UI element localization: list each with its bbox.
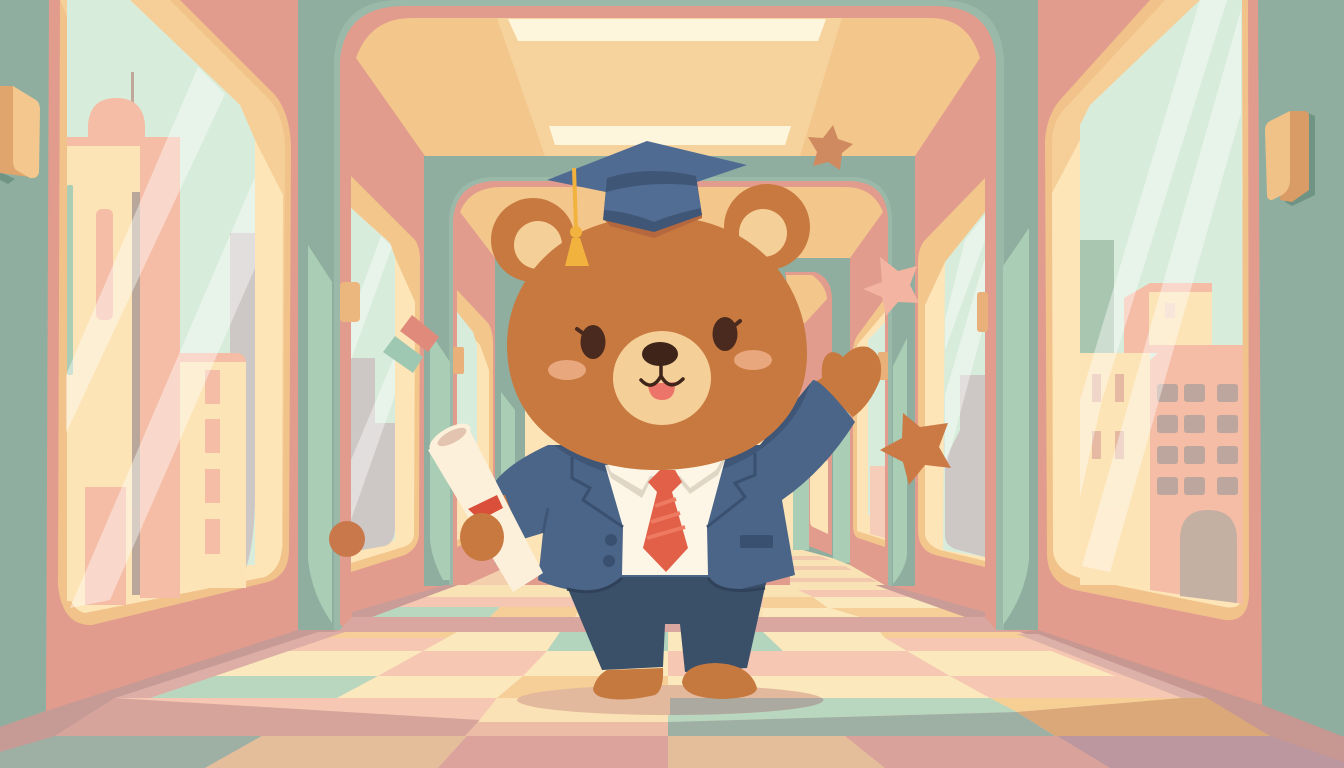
row4 teal — [668, 698, 1017, 722]
pink upper building — [1124, 283, 1212, 353]
cap skull — [603, 171, 702, 232]
left back window cream — [457, 320, 489, 540]
back baseboard right — [875, 585, 985, 622]
back floor orange right lower — [830, 608, 972, 617]
tower window slot — [96, 209, 113, 320]
icon: door handle right — [977, 292, 988, 332]
tassel fringe — [565, 238, 589, 266]
icon: confetti green — [383, 336, 423, 373]
bear jacket — [493, 380, 855, 592]
window glass — [1080, 0, 1243, 580]
panel: right mid window — [918, 178, 985, 567]
low building windows — [205, 370, 220, 554]
row3 pink right — [950, 676, 1182, 698]
row5 mauve — [1057, 736, 1344, 768]
back floor upper right pink — [798, 590, 915, 597]
bear — [425, 141, 881, 699]
jacket buttons — [603, 534, 617, 567]
cream building windows — [1092, 374, 1124, 459]
back floor orange tile left — [490, 607, 580, 617]
cream tower — [67, 146, 140, 601]
row2 cream centre — [523, 651, 668, 676]
row3 orange — [497, 676, 668, 698]
row5 peach — [205, 736, 467, 768]
row5 peach centre — [668, 736, 885, 768]
upper cream block — [1149, 292, 1212, 345]
jacket collar shadow — [554, 383, 810, 472]
glass reflections — [66, 67, 255, 608]
far teal accent — [833, 380, 850, 563]
window inner frame — [60, 0, 285, 550]
row4 orange dark — [1017, 698, 1270, 736]
tower mast — [131, 72, 134, 104]
row1 pink left — [280, 638, 450, 651]
far right small window — [810, 460, 828, 534]
left back window frame — [457, 290, 493, 547]
arched door — [1180, 510, 1237, 603]
nose — [642, 342, 678, 366]
far floor right stripes — [790, 556, 878, 582]
far hallway end — [525, 400, 793, 565]
left cheek — [548, 360, 586, 380]
bear left inner ear — [514, 221, 562, 269]
back hallway teal frame — [424, 156, 915, 586]
left far teal accent — [501, 392, 515, 500]
row4 cream — [478, 698, 668, 722]
cap board — [547, 141, 747, 192]
ceiling light front — [508, 19, 826, 41]
right pale wedge — [1017, 634, 1207, 698]
panel: right near window — [1045, 0, 1249, 620]
tie stripes — [647, 499, 685, 538]
left baseboard band — [0, 630, 340, 752]
far hallway teal frame — [495, 258, 850, 564]
upper pale window — [1165, 303, 1175, 318]
row4 dark teal — [668, 712, 1055, 736]
floor shadow — [517, 685, 823, 715]
row2 cream left — [213, 651, 423, 676]
eyelashes — [577, 321, 740, 334]
back floor teal tile — [360, 607, 500, 617]
icon: back handle left — [453, 347, 464, 374]
lamp side — [1280, 111, 1309, 202]
floor shadow grey half — [670, 698, 823, 715]
row4 pink — [465, 722, 668, 736]
bear muzzle — [613, 331, 711, 425]
far hall floor left — [462, 570, 525, 587]
reflections — [945, 215, 985, 470]
far teal panel — [793, 470, 809, 550]
right back window cream — [857, 312, 885, 540]
tassel cord — [574, 168, 576, 228]
tongue — [648, 382, 675, 400]
right back window pink reflection — [870, 466, 885, 538]
tie blade — [643, 492, 688, 572]
row5 teal left — [0, 736, 262, 768]
row1 teal — [547, 632, 668, 651]
row5 pink — [438, 736, 668, 768]
lamp shadow — [0, 172, 15, 184]
far hallway ceiling — [786, 275, 827, 323]
mouth — [641, 364, 683, 385]
bear legs — [560, 570, 770, 672]
row1 orange left — [300, 632, 457, 638]
bear left foot — [593, 668, 663, 699]
frame — [351, 176, 420, 572]
row5 pink right — [845, 736, 1110, 768]
lamp side — [0, 86, 36, 178]
back hallway arch — [453, 181, 888, 586]
tower pink base — [67, 137, 180, 598]
bear holding paw — [460, 513, 504, 561]
icon: left wall lamp — [0, 86, 40, 184]
glass — [943, 212, 985, 557]
bear raised paw — [815, 346, 881, 417]
back hallway ceiling — [460, 187, 883, 258]
panel: teal columns and arch surround — [298, 0, 1038, 630]
cream low building — [180, 362, 246, 588]
right lapel — [707, 453, 755, 527]
floor — [0, 550, 1344, 768]
window frame — [1045, 0, 1249, 620]
row1 pink right — [885, 638, 1051, 651]
icon: back handle right — [878, 352, 888, 380]
back floor cream right lower — [763, 608, 860, 617]
panel: left column accent — [308, 245, 332, 623]
reflections — [351, 236, 395, 520]
cream low roof — [180, 353, 246, 362]
far hall floor right — [790, 550, 888, 587]
collar — [607, 458, 723, 490]
icon: pink star — [863, 257, 919, 316]
panel: back-left column accent — [430, 332, 450, 580]
left back window glass — [457, 312, 477, 490]
window inner frame — [1052, 0, 1243, 200]
main floor base — [0, 632, 1344, 768]
glass reflections — [1080, 0, 1241, 572]
row3 cream right — [668, 676, 990, 698]
collar shadow — [605, 460, 725, 498]
cream interior — [1052, 140, 1243, 608]
scroll ribbon — [468, 495, 503, 520]
back hallway arch rim — [449, 177, 892, 586]
back baseboard left — [352, 585, 458, 617]
bear right ear — [724, 184, 810, 270]
row1 teal right — [740, 632, 783, 651]
icon: right wall lamp — [1265, 111, 1315, 206]
lamp front — [1265, 111, 1290, 200]
ceiling centre lighter panel — [497, 18, 842, 156]
left lapel — [572, 457, 623, 527]
back floor orange right upper — [763, 597, 828, 608]
back hall floor — [352, 585, 985, 617]
row2 pink right — [668, 651, 950, 676]
bear left ear — [491, 198, 575, 282]
thin arm behind scroll — [495, 495, 522, 545]
bear left eye — [580, 325, 606, 359]
bear head — [507, 216, 807, 470]
tie knot — [648, 470, 682, 492]
jacket pocket — [740, 535, 773, 548]
scroll — [425, 418, 543, 592]
shadow under head — [554, 383, 810, 472]
panel: far left teal wall — [0, 0, 49, 727]
icon: bottom star — [880, 413, 951, 485]
row2 cream right — [907, 651, 1115, 676]
frame — [918, 178, 985, 567]
window cream interior — [67, 0, 283, 613]
row3 teal left — [150, 676, 378, 698]
ceiling — [356, 18, 980, 156]
shadow band — [298, 617, 1038, 632]
cream interior — [351, 208, 415, 563]
row3 cream — [337, 676, 523, 698]
icon: confetti pink — [400, 315, 439, 352]
window frame — [58, 0, 291, 625]
cream interior — [925, 212, 985, 561]
panel: back-right column accent — [893, 338, 907, 584]
tower teal strip — [67, 185, 73, 375]
green building — [1080, 240, 1114, 353]
grey building — [230, 233, 255, 568]
right back window glass — [868, 322, 885, 520]
scroll body — [428, 427, 543, 592]
icon: door handle left — [340, 282, 360, 322]
bear right inner ear — [739, 209, 787, 257]
right cheek — [734, 350, 772, 370]
dark tower strip — [132, 192, 140, 595]
row1 orange right — [880, 632, 1035, 638]
far hallway arch wall — [785, 272, 832, 555]
right back window frame — [853, 298, 885, 547]
bear shirt — [605, 460, 725, 575]
necktie — [643, 470, 688, 572]
panel: far right teal wall — [1258, 0, 1344, 737]
scroll end — [425, 418, 475, 458]
panel: left mid window — [351, 176, 420, 572]
back floor cream right upper — [813, 597, 944, 608]
sleeve fold line — [543, 508, 548, 533]
lamp shadow — [1285, 112, 1315, 206]
graduation cap — [547, 141, 747, 266]
jacket hem shadows — [567, 578, 765, 592]
icon: top star — [808, 125, 853, 170]
bear right eye — [712, 317, 738, 351]
panel: left near window — [58, 0, 291, 625]
scroll inner — [435, 424, 469, 450]
building windows — [1157, 384, 1238, 495]
pink block — [85, 487, 126, 605]
cream building — [1080, 353, 1150, 585]
bear right foot — [682, 663, 757, 699]
row4 pink wedge left — [115, 698, 497, 720]
row2 pink — [378, 651, 547, 676]
left pale wedge — [115, 632, 345, 698]
row1 cream — [423, 632, 560, 651]
lamp front — [13, 86, 40, 178]
back floor left pink band — [385, 597, 958, 607]
row4 mauve left — [55, 698, 480, 736]
cap skull light — [604, 184, 701, 222]
icon: floating ball — [329, 521, 365, 557]
ceiling light back — [549, 126, 791, 145]
hall front pink arch — [340, 6, 996, 625]
row1 cream centre — [668, 632, 750, 651]
tassel knot — [570, 226, 582, 238]
ceiling arch light rim — [334, 0, 1004, 630]
cap underside shadow — [603, 213, 702, 238]
tower pink shoulder — [140, 137, 180, 150]
tower dome — [88, 98, 145, 137]
grey building — [351, 358, 395, 552]
glass — [351, 208, 395, 552]
right baseboard band — [1020, 630, 1344, 762]
pink main building — [1150, 345, 1243, 604]
window glass — [67, 0, 255, 565]
row4 orange light — [990, 698, 1182, 712]
row1 cream right — [763, 632, 907, 651]
panel: right column accent — [1003, 228, 1029, 625]
grey building — [945, 375, 985, 557]
